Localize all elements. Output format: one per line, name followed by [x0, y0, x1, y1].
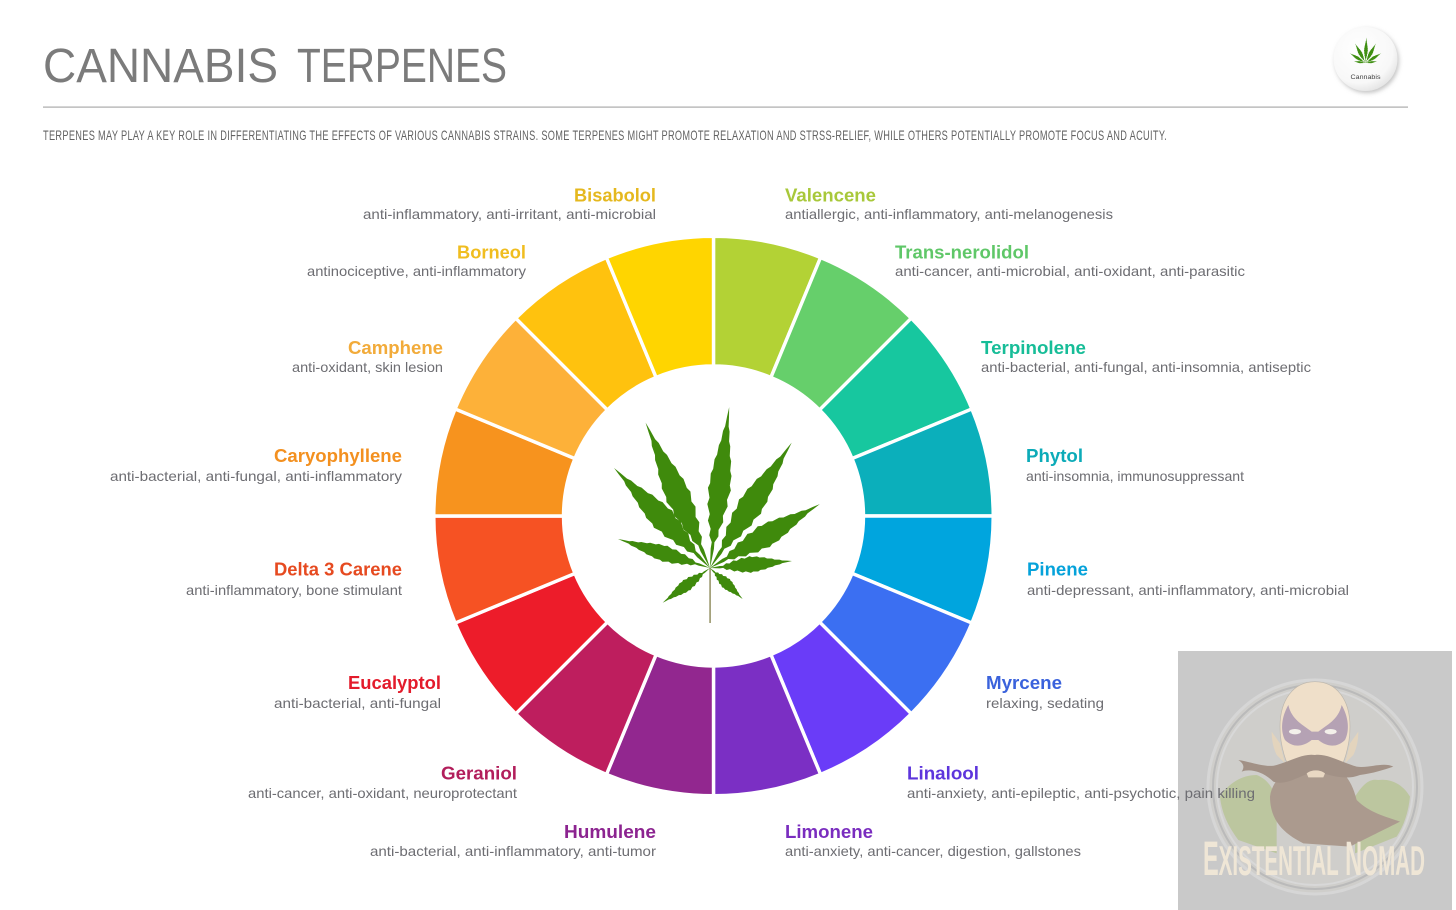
- label: Pinene: [1027, 558, 1349, 598]
- chart: terpene wheel: [414, 217, 1013, 815]
- label: Myrcene: [986, 672, 1104, 711]
- label: Caryophyllene: anti-bacterial, anti-fungal, anti-inflammatory: [110, 468, 402, 484]
- label: Humulene: [370, 821, 656, 859]
- label: Limonene: anti-anxiety, anti-cancer, digestion, gallstones: [785, 843, 1081, 859]
- label: Valencene: [785, 184, 1113, 222]
- label: Linalool: [907, 762, 1255, 801]
- label: Valencene: Valencene: [785, 184, 876, 206]
- icon: cannabis logo badge: [1334, 27, 1399, 93]
- label: Linalool: Linalool: [907, 762, 979, 784]
- label: Geraniol: anti-cancer, anti-oxidant, neuroprotectant: [248, 785, 517, 801]
- label: Phytol: [1026, 445, 1244, 484]
- label: Bisabolol: Bisabolol: [574, 184, 656, 206]
- label: Humulene: Humulene: [564, 821, 656, 842]
- label: Caryophyllene: Caryophyllene: [274, 445, 402, 466]
- label: Terpinolene: [981, 337, 1311, 375]
- label: Borneol: antinociceptive, anti-inflammatory: [307, 263, 526, 279]
- label: Terpinolene: anti-bacterial, anti-fungal, anti-insomnia, antiseptic: [981, 359, 1311, 375]
- label: Delta 3 Carene: Delta 3 Carene: [274, 558, 402, 580]
- label: Camphene: [292, 337, 443, 375]
- label: Trans-nerolidol: [895, 242, 1245, 279]
- label: Eucalyptol: Eucalyptol: [348, 672, 441, 693]
- label: Pinene: anti-depressant, anti-inflammatory, anti-microbial: [1027, 582, 1349, 598]
- label: Trans-nerolidol: Trans-nerolidol: [895, 242, 1029, 262]
- label: Humulene: anti-bacterial, anti-inflammatory, anti-tumor: [370, 843, 656, 859]
- label: Valencene: antiallergic, anti-inflammatory, anti-melanogenesis: [785, 206, 1113, 222]
- label: Delta 3 Carene: [186, 558, 402, 598]
- title: TERPENES: [297, 40, 507, 93]
- label: Limonene: Limonene: [785, 821, 873, 842]
- label: Delta 3 Carene: anti-inflammatory, bone stimulant: [186, 582, 402, 598]
- label: Camphene: Camphene: [348, 337, 443, 358]
- title: [43, 40, 507, 93]
- header rule: [43, 106, 1408, 108]
- watermark: Existential Nomad badge: [1178, 651, 1452, 910]
- label: Borneol: Borneol: [457, 242, 526, 262]
- label: Bisabolol: anti-inflammatory, anti-irritant, anti-microbial: [363, 206, 656, 222]
- label: Pinene: Pinene: [1027, 558, 1088, 580]
- title: CANNABIS: [43, 40, 278, 93]
- label: Geraniol: [248, 762, 517, 801]
- label: Eucalyptol: [274, 672, 441, 711]
- label: Eucalyptol: anti-bacterial, anti-fungal: [274, 695, 441, 711]
- label: Geraniol: Geraniol: [441, 762, 517, 784]
- label: Camphene: anti-oxidant, skin lesion: [292, 359, 443, 375]
- label: Borneol: [307, 242, 526, 279]
- label: Trans-nerolidol: anti-cancer, anti-microbial, anti-oxidant, anti-parasitic: [895, 263, 1245, 279]
- label: Caryophyllene: [110, 445, 402, 484]
- label: Phytol: anti-insomnia, immunosuppressant: [1026, 468, 1244, 484]
- icon: cannabis logo badge: Cannabis: [1350, 74, 1381, 81]
- label: Myrcene: relaxing, sedating: [986, 695, 1104, 711]
- label: Limonene: [785, 821, 1081, 859]
- label: Linalool: anti-anxiety, anti-epileptic, anti-psychotic, pain killing: [907, 785, 1255, 801]
- label: Terpinolene: Terpinolene: [981, 337, 1086, 358]
- label: Phytol: Phytol: [1026, 445, 1083, 466]
- label: Myrcene: Myrcene: [986, 672, 1062, 693]
- label: Bisabolol: [363, 184, 656, 222]
- icon: central cannabis leaf: [605, 406, 826, 623]
